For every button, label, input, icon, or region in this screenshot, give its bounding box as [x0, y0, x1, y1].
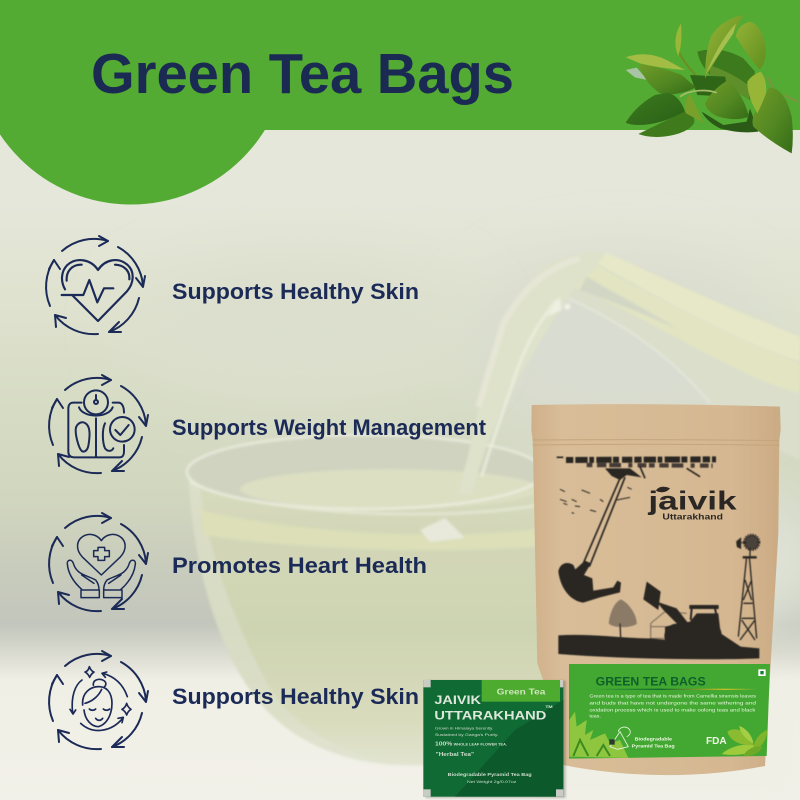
label: Supports Healthy Skin — [172, 684, 419, 709]
benefit row 4: healthy skin — [49, 651, 419, 749]
veg mark — [758, 669, 766, 676]
title: Green Tea Bags — [91, 42, 514, 106]
product: tea bag sachet — [423, 680, 566, 798]
benefit row 2: weight management — [49, 375, 487, 473]
sachet small text — [435, 726, 532, 784]
sachet body — [423, 680, 563, 797]
brand name: JAIVIK — [434, 693, 481, 707]
brand logo: jaivik Uttarakhand: jaivik — [647, 485, 737, 515]
small tree — [609, 599, 637, 627]
pyramid tea bag icon — [610, 727, 630, 749]
farm building — [651, 612, 687, 638]
label: Supports Healthy Skin — [172, 279, 419, 304]
sachet small text: Grown in Himalaya Serenity. — [435, 726, 493, 730]
benefit row 1: healthy skin — [46, 236, 419, 334]
product: tea bag sachet: Green Tea — [497, 686, 546, 696]
windmill — [738, 557, 757, 640]
silhouette artwork: tree, swing, child — [557, 457, 759, 659]
bag type text — [632, 736, 675, 749]
FDA mark: FDA — [706, 736, 727, 747]
brand name — [434, 693, 554, 723]
tea bowl — [187, 435, 570, 765]
sachet small text: Biodegradable Pyramid Tea Bag — [448, 772, 532, 777]
sachet small text: Sustained by Ganga's Purity. — [435, 733, 498, 737]
green product label — [569, 664, 770, 759]
ground — [558, 635, 759, 659]
label: Supports Weight Management — [172, 415, 487, 440]
bag type text: Biodegradable — [635, 736, 672, 741]
label heading: GREEN TEA BAGS — [596, 674, 706, 688]
sachet small text: Net Weight 2g/0.07oz — [467, 780, 517, 784]
bag type text: Pyramid Tea Bag — [632, 744, 675, 749]
label description: and buds that have not undergone the same withering and — [589, 701, 757, 706]
pouring water stream and spout — [458, 252, 800, 495]
tractor loader — [643, 582, 661, 610]
icon: heart with cross above two hands — [49, 513, 148, 611]
brand name: UTTARAKHAND — [434, 709, 546, 723]
sachet small text: WHOLE LEAF FLOWER TEA. — [454, 742, 507, 746]
plant image — [569, 712, 628, 758]
pouch body — [531, 404, 781, 775]
brand name: TM — [545, 704, 554, 709]
label description: teas. — [589, 714, 601, 719]
sachet small text: 100% — [435, 741, 452, 747]
product: kraft pouch — [531, 404, 781, 775]
green tea tab — [482, 680, 560, 702]
icon: weighing scale with check mark — [49, 375, 148, 473]
icon: woman face with sparkles — [49, 651, 148, 749]
label description: oxidation process which is used to make oolong teas and black — [589, 708, 756, 713]
label: Promotes Heart Health — [172, 553, 427, 578]
header green banner — [0, 0, 800, 204]
label description: Green tea is a type of tea that is made from Camellia sinensis leaves — [589, 694, 757, 699]
tea leaves cluster — [626, 15, 798, 153]
benefit row 3: heart health — [49, 513, 427, 611]
label leaves — [722, 745, 762, 755]
label description — [589, 694, 757, 719]
sachet small text: "Herbal Tea" — [436, 752, 474, 758]
brand logo: jaivik Uttarakhand: Uttarakhand — [662, 511, 723, 521]
brand logo: jaivik Uttarakhand — [647, 485, 737, 521]
icon: heart with pulse line — [46, 236, 145, 334]
